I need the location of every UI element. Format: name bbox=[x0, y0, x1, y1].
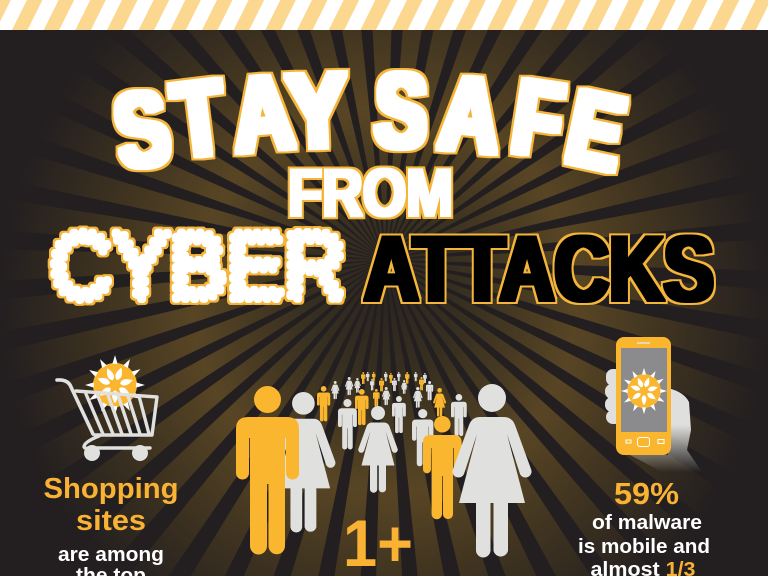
title: stay safe: A bbox=[228, 53, 298, 176]
title: stay safe: S bbox=[106, 67, 178, 192]
icon: hand holding phone with virus bbox=[605, 337, 702, 472]
title: stay safe: F bbox=[505, 57, 571, 181]
title: from: FROM bbox=[288, 155, 453, 231]
text: are among the top bbox=[58, 544, 164, 576]
heading: shopping sites bbox=[44, 473, 178, 537]
stat: 59%: 59% bbox=[614, 476, 679, 511]
title: stay safe: S bbox=[373, 51, 429, 171]
text: are among the top: are among bbox=[58, 544, 164, 566]
top hazard stripe band bbox=[0, 0, 768, 30]
crowd of people bbox=[236, 372, 532, 557]
heading: shopping sites: sites bbox=[76, 505, 146, 537]
text: of malware is mobile and almost 1/3 bbox=[578, 512, 710, 576]
panel: shopping sites bbox=[44, 355, 178, 576]
panel: mobile malware bbox=[578, 337, 710, 576]
text: of malware is mobile and almost 1/3: of malware bbox=[592, 512, 702, 534]
title: stay safe: T bbox=[167, 58, 231, 181]
heading: shopping sites: Shopping bbox=[44, 473, 178, 505]
icon: virus over shopping cart bbox=[57, 355, 157, 461]
title: stay safe: Y bbox=[284, 50, 350, 171]
title: stay safe: E bbox=[558, 67, 635, 194]
title: stay safe: A bbox=[435, 54, 505, 177]
text: of malware is mobile and almost 1/3: is mobile and bbox=[578, 536, 710, 558]
title: stay safe bbox=[106, 50, 635, 194]
title: cyber: CYBER bbox=[50, 213, 346, 318]
